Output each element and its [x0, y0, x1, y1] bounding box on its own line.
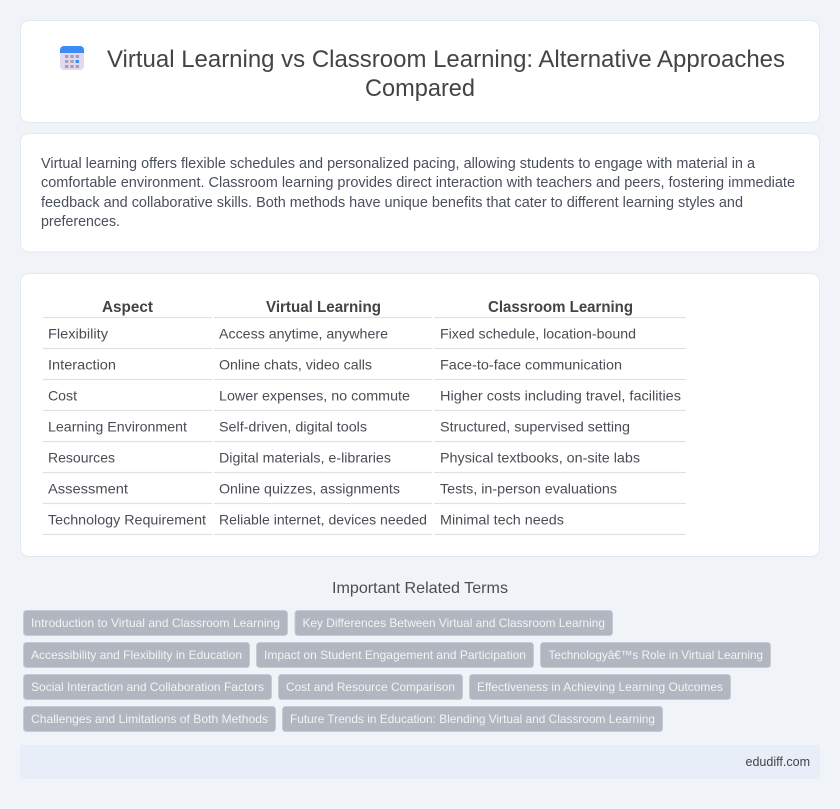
row: cost: Higher costs including travel, facilities	[440, 388, 681, 404]
tag	[295, 610, 612, 636]
icon: calendar	[60, 46, 84, 70]
tag: Impact on Student Engagement and Participation	[264, 648, 526, 662]
row: resources: Digital materials, e-libraries	[219, 450, 391, 466]
row: interaction: Face-to-face communication	[440, 356, 622, 372]
tag: Future Trends in Education: Blending Virtual and Classroom Learning	[290, 712, 655, 726]
tag: Accessibility and Flexibility in Education	[31, 648, 242, 662]
tag	[24, 674, 272, 700]
tag	[470, 674, 730, 700]
row: cost: Cost	[48, 388, 77, 404]
summary text: comfortable environment. Classroom learning provides direct interaction with teachers and peers, fostering immediate	[41, 175, 795, 191]
tag: Key Differences Between Virtual and Classroom Learning	[302, 616, 605, 630]
tag: Effectiveness in Achieving Learning Outcomes	[477, 680, 723, 694]
row: assessment: Tests, in-person evaluations	[440, 480, 617, 496]
row: learning environment: Self-driven, digital tools	[219, 418, 367, 434]
row: resources: Physical textbooks, on-site labs	[440, 450, 640, 466]
row: technology requirement: Reliable internet, devices needed	[219, 512, 427, 528]
tag	[24, 642, 250, 668]
row: flexibility	[48, 326, 636, 342]
footer: edudiff.com	[746, 754, 810, 769]
table header row: Virtual Learning	[266, 299, 381, 316]
row: interaction	[48, 356, 622, 372]
tag: Technologyâ€™s Role in Virtual Learning	[548, 648, 763, 662]
summary text: feedback and collaborative skills. Both methods have unique benefits that cater to different learning styles and	[41, 195, 743, 211]
title	[107, 46, 785, 102]
tag	[282, 706, 662, 732]
row: assessment	[48, 480, 617, 496]
row: resources	[48, 450, 640, 466]
row: cost	[48, 388, 681, 404]
row: interaction: Interaction	[48, 356, 116, 372]
summary text: Virtual learning offers flexible schedules and personalized pacing, allowing students to engage with material in a	[41, 156, 755, 172]
row: technology requirement: Minimal tech needs	[440, 512, 564, 528]
table header row: Classroom Learning	[488, 299, 633, 316]
summary text: preferences.	[41, 214, 120, 230]
row: flexibility: Flexibility	[48, 326, 108, 342]
row: technology requirement: Technology Requirement	[48, 512, 206, 528]
tag	[278, 674, 462, 700]
tag	[24, 610, 288, 636]
tag: Introduction to Virtual and Classroom Learning	[31, 616, 280, 630]
title: Compared	[365, 75, 475, 102]
row: technology requirement	[48, 512, 564, 528]
heading: important related terms: Important Related Terms	[332, 580, 508, 597]
tag: Cost and Resource Comparison	[286, 680, 455, 694]
footer	[20, 745, 820, 779]
tag: Challenges and Limitations of Both Methods	[31, 712, 268, 726]
table header row: Aspect	[102, 299, 154, 316]
summary text	[41, 156, 795, 230]
panel: summary	[20, 134, 820, 252]
table header row	[102, 299, 633, 316]
tag: Social Interaction and Collaboration Factors	[31, 680, 264, 694]
row: flexibility: Access anytime, anywhere	[219, 326, 388, 342]
related terms tags	[24, 610, 770, 732]
row: learning environment: Learning Environment	[48, 418, 187, 434]
title: Virtual Learning vs Classroom Learning: Alternative Approaches	[107, 46, 785, 73]
row: learning environment: Structured, supervised setting	[440, 418, 630, 434]
tag	[24, 706, 276, 732]
tag	[540, 642, 770, 668]
row: flexibility: Fixed schedule, location-bound	[440, 326, 636, 342]
row: learning environment	[48, 418, 630, 434]
row: interaction: Online chats, video calls	[219, 356, 372, 372]
row: resources: Resources	[48, 450, 115, 466]
row: cost: Lower expenses, no commute	[219, 388, 410, 404]
panel: title header	[20, 20, 820, 122]
panel: comparison table	[20, 274, 820, 556]
row: assessment: Online quizzes, assignments	[219, 480, 400, 496]
tag	[256, 642, 534, 668]
row: assessment: Assessment	[48, 480, 128, 496]
